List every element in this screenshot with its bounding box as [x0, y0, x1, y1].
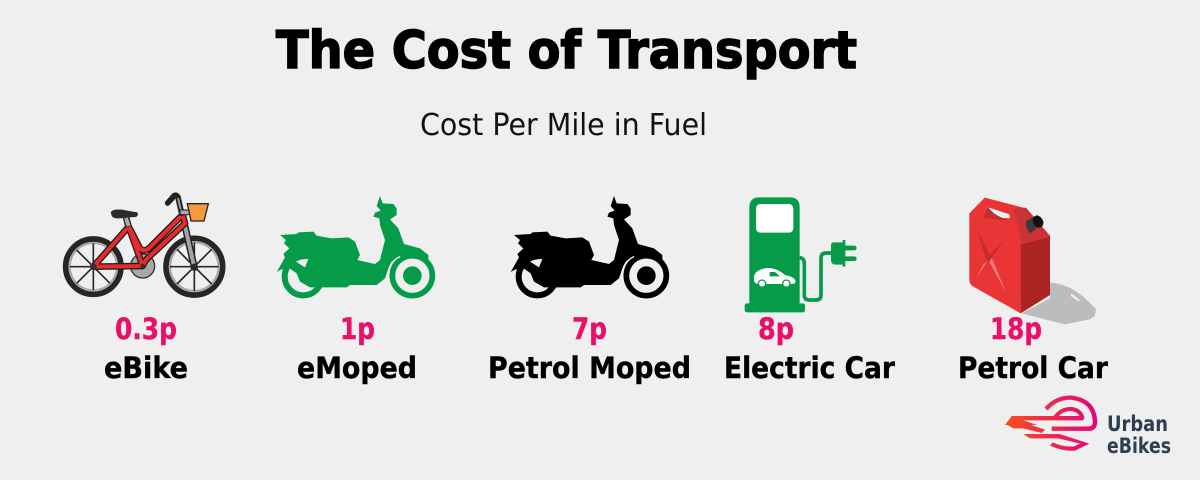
value: eBike: 0.3p [115, 312, 177, 346]
value: Petrol Moped: 7p [572, 312, 607, 346]
screen [756, 204, 793, 233]
value: Petrol Car: 18p [990, 312, 1042, 346]
label: Electric Car: Electric Car [724, 351, 896, 385]
basket [187, 204, 208, 221]
icon: EV charging station [745, 197, 857, 312]
chainring [131, 254, 155, 278]
icon: green electric moped [277, 196, 432, 296]
seat post [126, 217, 129, 227]
logo wordmark line 2: eBikes [1107, 434, 1171, 458]
subtitle: Cost Per Mile in Fuel [420, 108, 707, 143]
logo: Urban eBikes [1005, 398, 1171, 458]
body [277, 196, 428, 287]
label: eMoped: eMoped [297, 351, 417, 385]
pump body [749, 197, 800, 304]
tail opening [296, 259, 308, 267]
can side [1021, 235, 1050, 313]
rear wheel [285, 258, 322, 295]
top face [985, 198, 1049, 244]
tail opening [530, 259, 542, 267]
handlebar [168, 195, 182, 213]
car [754, 268, 796, 288]
pump base [745, 303, 805, 312]
icon: red ebike [66, 195, 223, 295]
logo mark [1005, 398, 1095, 451]
rear wheel [519, 258, 556, 295]
front wheel [166, 238, 223, 295]
red frame [93, 215, 185, 267]
label: Petrol Car: Petrol Car [958, 351, 1109, 385]
value: eMoped: 1p [340, 312, 375, 346]
logo wordmark: Urban [1107, 412, 1168, 436]
fork [184, 223, 194, 267]
frame outline [93, 215, 185, 267]
icon: red petrol jerry can [969, 198, 1096, 324]
plug [831, 240, 845, 267]
x emboss [977, 231, 1006, 292]
label: eBike: eBike [104, 351, 188, 385]
label: Petrol Moped: Petrol Moped [488, 351, 691, 385]
shadow [1022, 283, 1096, 324]
can front [969, 198, 1049, 313]
rear wheel [66, 239, 121, 294]
icon: black petrol moped [511, 196, 666, 296]
front wheel [392, 256, 432, 296]
handle [983, 208, 1011, 220]
front wheel [626, 256, 666, 296]
title: The Cost of Transport [276, 21, 857, 81]
neck panel [1014, 208, 1049, 243]
spout [1026, 215, 1044, 233]
body [511, 196, 662, 287]
saddle [111, 209, 138, 218]
cable [800, 253, 832, 300]
value: Electric Car: 8p [758, 312, 794, 346]
